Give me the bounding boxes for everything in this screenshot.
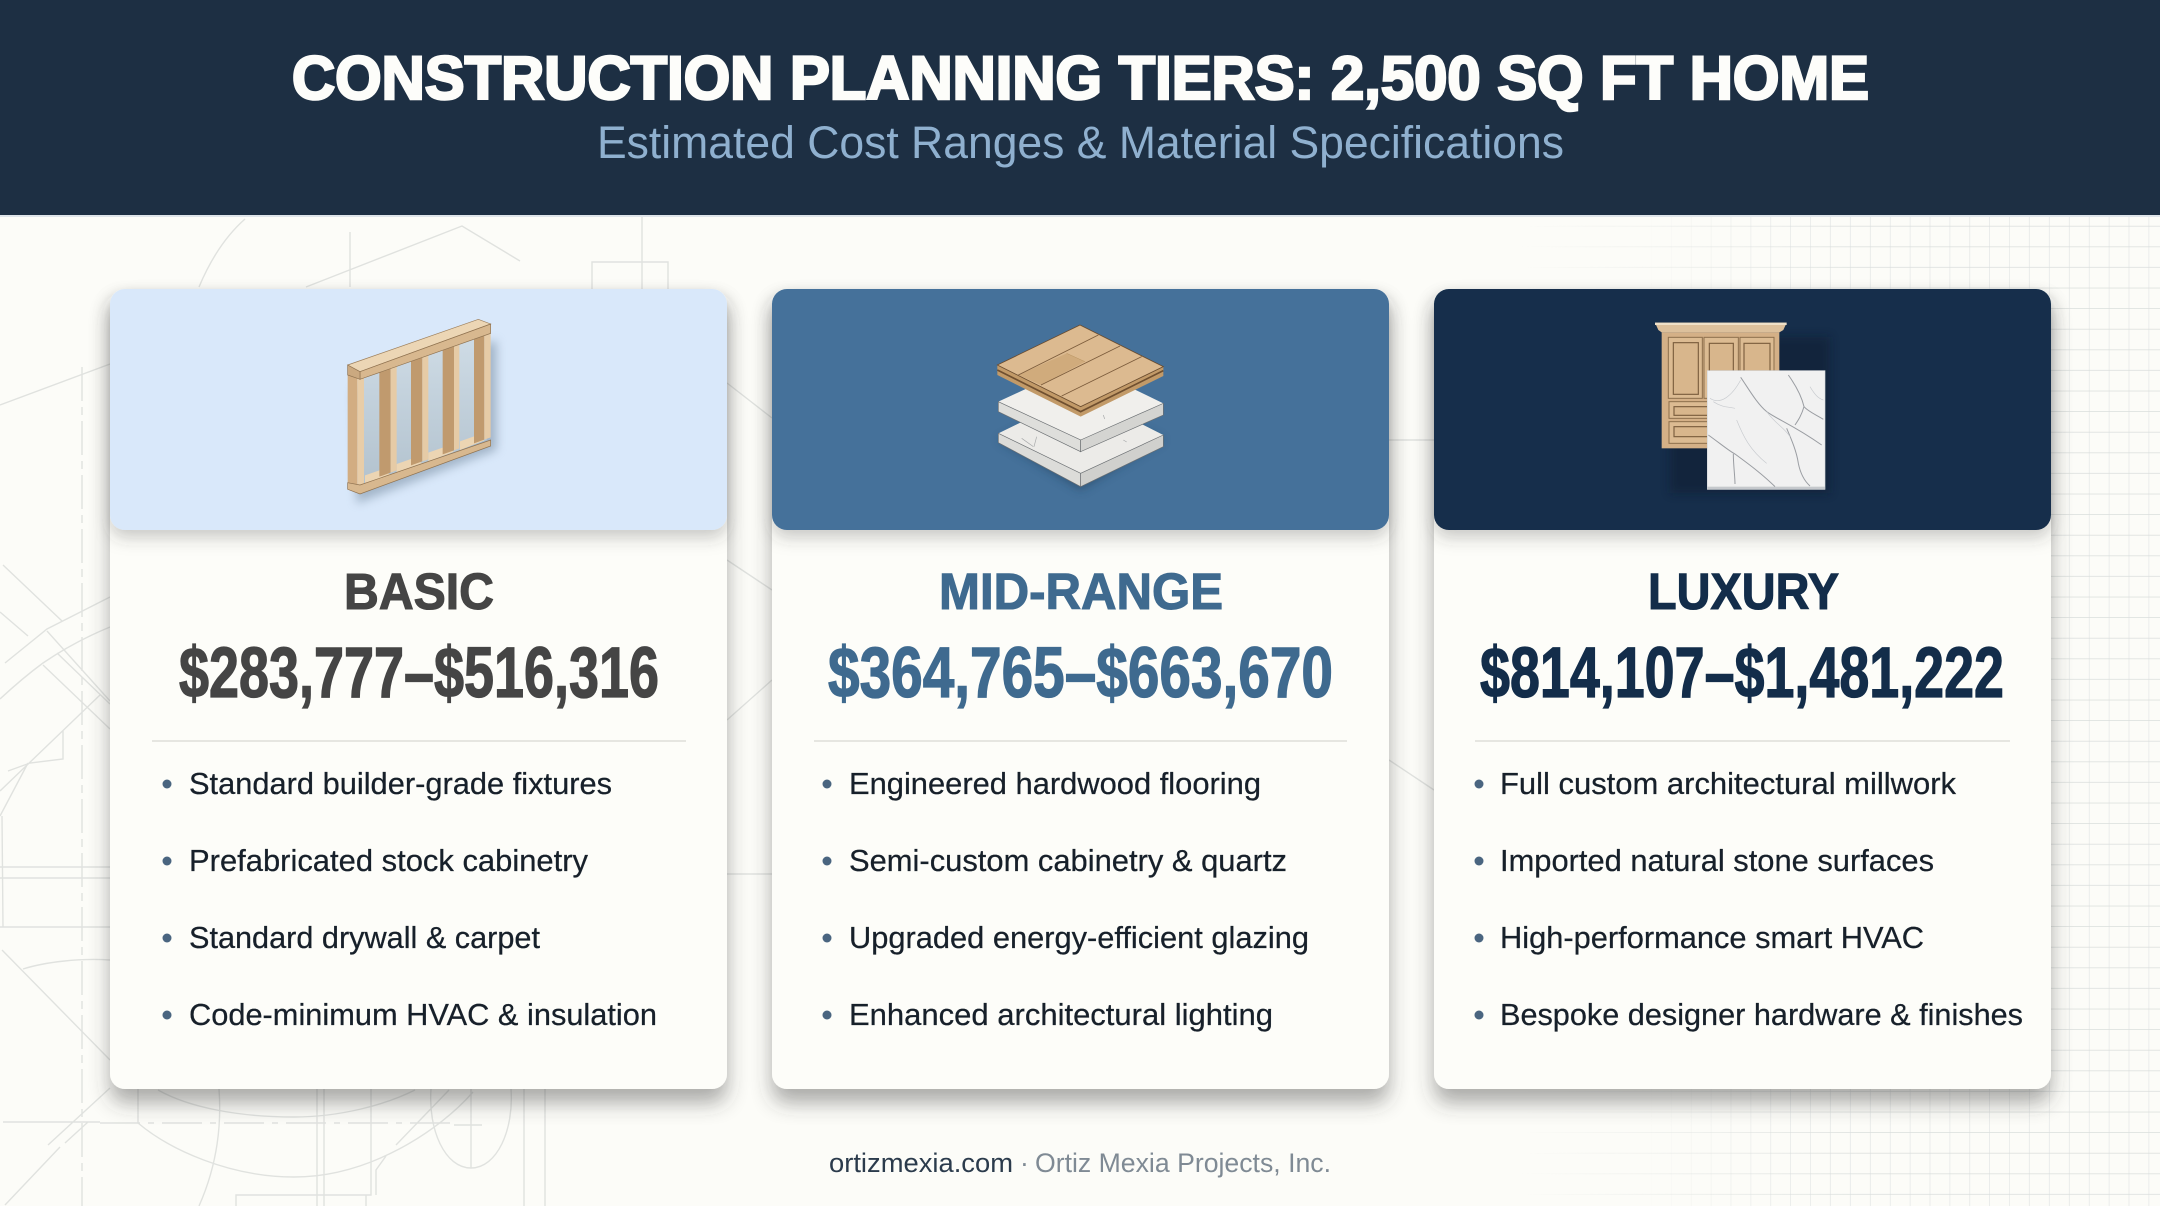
basic feature list: Standard builder-grade fixtures bbox=[189, 767, 612, 801]
mid-range feature list: Upgraded energy-efficient glazing bbox=[849, 921, 1309, 955]
mid-range image header bbox=[772, 289, 1389, 530]
basic price range: $283,777–$516,316 bbox=[179, 634, 659, 713]
footer: Ortiz Mexia Projects, Inc. bbox=[1035, 1148, 1331, 1178]
header band bbox=[0, 0, 2160, 217]
mid-range price range: $364,765–$663,670 bbox=[828, 634, 1333, 713]
luxury tier label: LUXURY bbox=[1648, 563, 1839, 620]
luxury feature list: Bespoke designer hardware & finishes bbox=[1500, 998, 2023, 1032]
luxury feature list: High-performance smart HVAC bbox=[1500, 921, 1924, 955]
basic feature list: Standard drywall & carpet bbox=[189, 921, 541, 955]
title: CONSTRUCTION PLANNING TIERS: 2,500 SQ FT HOME bbox=[292, 44, 1869, 112]
basic feature list: Code-minimum HVAC & insulation bbox=[189, 998, 657, 1032]
luxury feature list: Imported natural stone surfaces bbox=[1500, 844, 1934, 878]
footer bbox=[829, 1148, 1331, 1178]
luxury feature list: Full custom architectural millwork bbox=[1500, 767, 1957, 801]
icon: stacked flooring layers bbox=[997, 325, 1163, 490]
background blueprint linework bbox=[0, 216, 1434, 1206]
luxury price range: $814,107–$1,481,222 bbox=[1480, 634, 2004, 713]
subtitle: Estimated Cost Ranges & Material Specifications bbox=[597, 117, 1564, 168]
icon: wood wall framing bbox=[348, 319, 497, 503]
footer: · bbox=[1020, 1148, 1029, 1178]
mid-range feature list: Engineered hardwood flooring bbox=[849, 767, 1261, 801]
panel: mid-range bbox=[772, 289, 1389, 1089]
luxury image header bbox=[1434, 289, 2051, 530]
background grid pattern bbox=[1597, 217, 2160, 1206]
basic feature list: Prefabricated stock cabinetry bbox=[189, 844, 589, 878]
mid-range feature list: Semi-custom cabinetry & quartz bbox=[849, 844, 1287, 878]
mid-range feature list bbox=[822, 767, 1309, 1032]
icon: custom millwork cabinet and marble slab bbox=[1655, 323, 1830, 493]
luxury feature list bbox=[1474, 767, 2023, 1032]
mid-range tier label: MID-RANGE bbox=[939, 563, 1223, 620]
footer: ortizmexia.com bbox=[829, 1148, 1013, 1178]
basic tier label: BASIC bbox=[344, 563, 494, 620]
basic image header bbox=[110, 289, 727, 530]
mid-range feature list: Enhanced architectural lighting bbox=[849, 998, 1273, 1032]
panel: basic bbox=[110, 289, 727, 1089]
basic feature list bbox=[162, 767, 657, 1032]
panel: luxury bbox=[1434, 289, 2051, 1089]
